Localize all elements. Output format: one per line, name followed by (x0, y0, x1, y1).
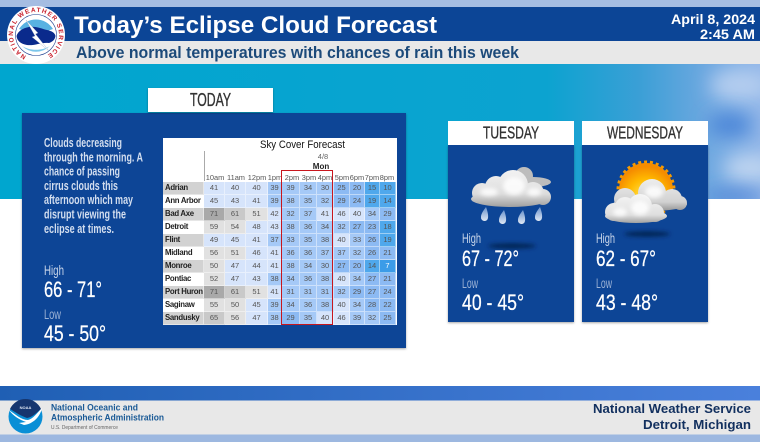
tuesday high: High (462, 230, 481, 246)
data grid: 37 (270, 234, 279, 244)
office name (593, 401, 751, 432)
panel: wednesday (582, 121, 708, 322)
tuesday low (462, 275, 524, 315)
data grid: 10 (383, 182, 392, 192)
wednesday low (596, 275, 658, 315)
white lower background (0, 199, 760, 386)
today forecast text: afternoon which may (44, 193, 133, 207)
data grid: 38 (321, 234, 329, 244)
hour labels: 8pm (380, 173, 394, 182)
data grid: 20 (353, 182, 361, 192)
today forecast text: cirrus clouds this (44, 179, 118, 193)
data grid: 45 (231, 234, 239, 244)
data grid: 56 (210, 248, 218, 256)
data grid: 38 (270, 312, 279, 322)
hour labels: 1pm (268, 173, 282, 182)
data grid: 7 (385, 260, 390, 270)
data grid: 42 (270, 208, 279, 218)
today forecast text: Clouds decreasing (44, 136, 122, 150)
data grid (163, 182, 396, 325)
data grid: 43 (231, 196, 239, 204)
today low: 45 - 50° (44, 321, 106, 346)
today forecast text (44, 136, 143, 236)
data grid: 32 (321, 196, 329, 204)
data grid: 18 (383, 222, 392, 230)
data grid: 45 (252, 300, 261, 308)
today low (44, 306, 106, 346)
data grid: 27 (353, 222, 361, 230)
today forecast text: through the morning. A (44, 150, 143, 164)
data grid: 29 (383, 208, 392, 218)
date and time: April 8, 2024 (671, 12, 756, 27)
data grid: 39 (270, 196, 279, 204)
panel: today (22, 88, 406, 348)
tuesday low: 40 - 45° (462, 290, 524, 315)
data grid: Port Huron (165, 286, 203, 296)
today tab: TODAY (190, 90, 231, 110)
data grid: 20 (353, 260, 361, 270)
eclipse window highlight box (281, 170, 333, 325)
data grid: 29 (286, 312, 295, 322)
data grid: 33 (286, 234, 295, 244)
hour labels: 3pm (302, 173, 316, 182)
data grid: Flint (165, 234, 180, 244)
data grid: 29 (353, 286, 361, 296)
NOAA name: Atmospheric Administration (51, 412, 164, 424)
NOAA name: National Oceanic and (51, 402, 138, 414)
data grid: 38 (286, 222, 295, 230)
icon shadow (624, 232, 670, 236)
data grid: 19 (383, 234, 392, 244)
data grid: 19 (368, 196, 376, 204)
icon: NOAA logo: NOAA (20, 405, 31, 410)
data grid: 71 (210, 286, 218, 296)
wednesday low: 43 - 48° (596, 290, 658, 315)
data grid: 47 (231, 274, 239, 282)
data grid: 47 (231, 260, 239, 270)
today panel body (22, 113, 406, 348)
today forecast text: disrupt viewing the (44, 208, 126, 222)
data grid: 34 (353, 300, 361, 308)
data grid: 40 (337, 300, 346, 308)
data grid: 43 (252, 274, 261, 282)
office name: National Weather Service (593, 401, 751, 416)
data grid: 56 (231, 312, 239, 322)
hour labels: 6pm (350, 173, 364, 182)
NOAA name: U.S. Department of Commerce (51, 425, 118, 431)
icon shadow (488, 244, 536, 248)
today low: Low (44, 306, 62, 322)
data grid: 54 (231, 222, 239, 230)
data grid: Sandusky (165, 312, 199, 322)
data grid: 24 (383, 286, 392, 296)
data grid: 38 (321, 300, 329, 308)
data grid: 47 (252, 312, 261, 322)
data grid: 31 (321, 286, 329, 296)
data grid: 55 (210, 300, 218, 308)
data grid: Monroe (165, 260, 191, 270)
data grid: 21 (383, 274, 392, 282)
axis line (204, 151, 205, 181)
data grid: 50 (210, 260, 218, 270)
data grid: 46 (337, 208, 346, 218)
hour labels: 5pm (335, 173, 349, 182)
hour labels: 12pm (248, 173, 266, 182)
data grid: 36 (304, 222, 312, 230)
data grid: 52 (210, 274, 218, 282)
tuesday tab: TUESDAY (483, 122, 539, 142)
data grid: 36 (286, 248, 295, 256)
data grid: 45 (210, 196, 218, 204)
tuesday high: 67 - 72° (462, 246, 519, 271)
chart title: Sky Cover Forecast (260, 139, 345, 151)
wednesday high: High (596, 230, 615, 246)
data grid: 24 (353, 196, 361, 204)
data grid: 14 (368, 260, 376, 270)
day header: Mon (313, 162, 329, 171)
data grid: Midland (165, 248, 192, 256)
data grid: 39 (286, 182, 295, 192)
office name: Detroit, Michigan (643, 417, 751, 432)
data grid: 41 (252, 234, 261, 244)
wednesday low: Low (596, 275, 613, 291)
icon: rain cloud (471, 167, 551, 224)
NOAA name (51, 402, 164, 431)
data grid: 40 (353, 208, 361, 218)
data grid: 33 (353, 234, 361, 244)
sky background with clouds (0, 64, 760, 201)
data grid: 51 (252, 286, 261, 296)
data grid: 34 (286, 300, 295, 308)
data grid: 71 (210, 208, 218, 218)
data grid: 34 (304, 182, 312, 192)
data grid: 59 (210, 222, 218, 230)
icon: sun behind clouds (605, 162, 687, 223)
data grid: 36 (304, 248, 312, 256)
subtitle: Above normal temperatures with chances of rain this week (76, 44, 520, 62)
data grid: 32 (337, 222, 346, 230)
wednesday high (596, 230, 656, 271)
data grid: 65 (210, 312, 218, 322)
tuesday low: Low (462, 275, 479, 291)
data grid: 30 (321, 182, 329, 192)
data grid: 34 (368, 208, 376, 218)
tuesday high (462, 230, 519, 271)
today tab (148, 88, 273, 112)
date and time: 2:45 AM (700, 27, 755, 42)
data grid: 22 (383, 300, 392, 308)
data grid: 40 (337, 234, 346, 244)
data grid: 41 (270, 260, 279, 270)
hour labels: 7pm (365, 173, 379, 182)
data grid: 28 (368, 300, 376, 308)
data grid: 38 (270, 274, 279, 282)
data grid: 49 (210, 234, 218, 244)
today high (44, 262, 102, 302)
data grid: 26 (368, 234, 376, 244)
date and time (671, 12, 756, 42)
today high: 66 - 71° (44, 277, 102, 302)
data grid: 27 (368, 274, 376, 282)
data grid: Adrian (165, 182, 188, 192)
data grid: 44 (252, 260, 261, 270)
data grid: 61 (231, 208, 239, 218)
data grid: 35 (304, 196, 312, 204)
tuesday tab (448, 121, 574, 145)
today high: High (44, 262, 64, 278)
data grid: 41 (270, 248, 279, 256)
footer bars (0, 386, 760, 442)
data grid: 41 (252, 196, 261, 204)
data grid: 43 (270, 222, 279, 230)
data grid: 34 (353, 274, 361, 282)
data grid: 27 (337, 260, 346, 270)
data grid: 39 (353, 312, 361, 322)
data grid: 39 (270, 182, 279, 192)
data grid: 48 (252, 222, 261, 230)
top accent strip (0, 0, 760, 7)
hour labels: 11am (227, 173, 245, 182)
data grid: 15 (368, 182, 376, 192)
data grid: 34 (304, 260, 312, 270)
data grid: 38 (286, 196, 295, 204)
wednesday high: 62 - 67° (596, 246, 656, 271)
data grid: 34 (286, 274, 295, 282)
today forecast text: eclipse at times. (44, 222, 114, 236)
data grid: 46 (252, 248, 261, 256)
data grid: 40 (337, 274, 346, 282)
data grid: 25 (337, 182, 346, 192)
data grid: 37 (337, 248, 346, 256)
hour labels: 10am (206, 173, 224, 182)
data grid: 31 (304, 286, 312, 296)
data grid: 32 (286, 208, 295, 218)
data grid: 39 (270, 300, 279, 308)
data grid: 23 (368, 222, 376, 230)
data grid: 14 (383, 196, 392, 204)
data grid: 35 (304, 234, 312, 244)
data grid: 31 (286, 286, 295, 296)
data grid: Saginaw (165, 300, 195, 308)
icon: National Weather Service logo: NATIONAL WEATHER SERVICE (8, 8, 64, 60)
data grid: 50 (231, 300, 239, 308)
data grid: 34 (321, 222, 329, 230)
data grid: 41 (321, 208, 329, 218)
data grid: 27 (368, 286, 376, 296)
data grid: 32 (353, 248, 361, 256)
data grid: 36 (304, 300, 312, 308)
data grid: 40 (252, 182, 261, 192)
data grid: 25 (383, 312, 392, 322)
title: Today’s Eclipse Cloud Forecast (74, 12, 437, 39)
data grid: Pontiac (165, 274, 191, 282)
data grid: 51 (231, 248, 239, 256)
data grid: 38 (286, 260, 295, 270)
data grid: 41 (210, 182, 218, 192)
today forecast text: chance of passing (44, 164, 120, 178)
data grid: 32 (368, 312, 376, 322)
data grid: 40 (321, 312, 329, 322)
panel: tuesday (448, 121, 574, 322)
data grid: Ann Arbor (165, 196, 201, 204)
hour labels: 2pm (285, 173, 299, 182)
header bar (0, 7, 760, 64)
data grid: Bad Axe (165, 208, 194, 218)
data grid: 51 (252, 208, 261, 218)
date header: 4/8 (318, 152, 328, 161)
wednesday panel body (582, 145, 708, 322)
data grid: 29 (337, 196, 346, 204)
data grid: 30 (321, 260, 329, 270)
data grid: 40 (231, 182, 239, 192)
hour labels (206, 173, 394, 182)
tuesday panel body (448, 145, 574, 322)
wednesday tab: WEDNESDAY (607, 122, 683, 142)
wednesday tab (582, 121, 708, 145)
data grid: 38 (321, 274, 329, 282)
data grid: 37 (321, 248, 329, 256)
data grid: 41 (270, 286, 279, 296)
data grid: 61 (231, 286, 239, 296)
data grid: 32 (337, 286, 346, 296)
data grid: 46 (337, 312, 346, 322)
data grid: 21 (383, 248, 392, 256)
chart: sky cover forecast table (163, 138, 397, 325)
data grid: 35 (304, 312, 312, 322)
data grid: 36 (304, 274, 312, 282)
data grid: 37 (304, 208, 312, 218)
data grid: Detroit (165, 222, 188, 230)
icon: NOAA logo (8, 399, 42, 434)
data grid: 26 (368, 248, 376, 256)
hour labels: 4pm (318, 173, 332, 182)
